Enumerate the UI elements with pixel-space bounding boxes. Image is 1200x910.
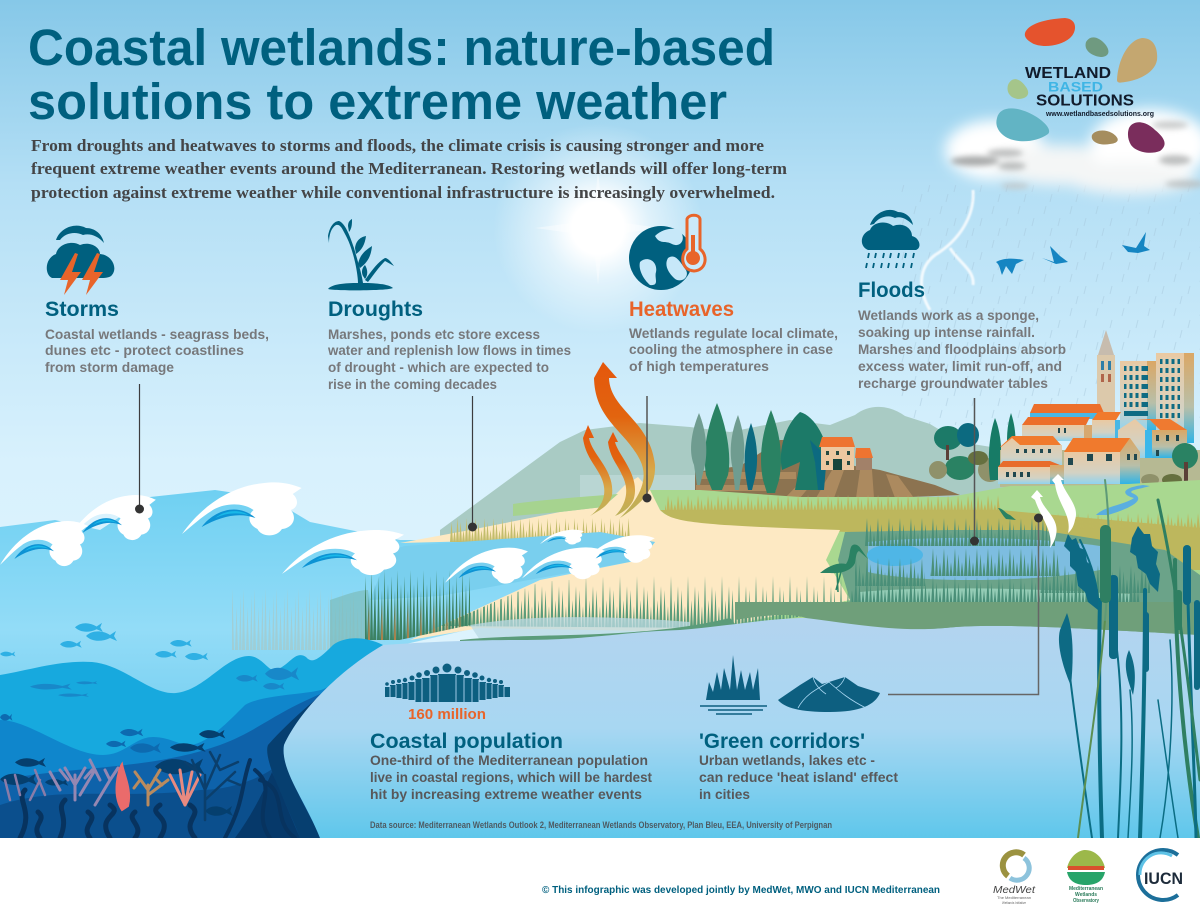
body text — [699, 752, 898, 802]
wave 2 — [68, 495, 156, 540]
panel: storms — [45, 226, 269, 375]
logo: Mediterranean Wetlands Observatory: Mediterranean — [1069, 886, 1104, 892]
white water arrows — [1031, 474, 1076, 548]
trees — [691, 403, 843, 493]
body text — [858, 308, 1066, 391]
body text: of drought - which are expected to — [328, 360, 549, 375]
beach and dune — [400, 477, 850, 640]
wave 1 — [0, 521, 88, 566]
pond — [850, 518, 1150, 618]
small bird — [998, 508, 1016, 520]
pointer line: floods — [970, 398, 979, 546]
pointer line: heatwaves — [642, 396, 652, 502]
green land — [640, 480, 1200, 640]
logo: Mediterranean Wetlands Observatory: Wetlands — [1075, 892, 1097, 898]
body text: One-third of the Mediterranean population — [370, 752, 648, 768]
intro text: protection against extreme weather while conventional infrastructure is increasingly overwhelmed. — [31, 183, 775, 202]
body text — [370, 752, 652, 802]
river — [1096, 485, 1150, 515]
sea body — [0, 490, 660, 840]
icon: globe and thermometer — [629, 215, 705, 290]
heading: Floods — [858, 279, 925, 302]
icon: drooping plant — [328, 219, 394, 290]
body text — [629, 326, 838, 374]
heading: Storms — [45, 298, 119, 321]
logo: wetland based solutions: BASED — [1048, 78, 1103, 94]
houses — [998, 404, 1187, 484]
body text: excess water, limit run-off, and — [858, 359, 1062, 374]
panel: floods — [858, 210, 1066, 391]
panel: green corridors — [699, 655, 898, 802]
title: solutions to extreme weather — [28, 73, 727, 130]
body text — [327, 327, 571, 392]
sun glow — [493, 123, 703, 333]
data source: Data source: Mediterranean Wetlands Outlook 2, Mediterranean Wetlands Observatory, Plan Bleu, EEA, University of Perpignan — [370, 820, 832, 830]
submerged reeds — [232, 570, 470, 655]
far right tree — [1141, 443, 1198, 486]
title — [28, 19, 775, 130]
body text: Coastal wetlands - seagrass beds, — [45, 327, 269, 342]
body text: Marshes and floodplains absorb — [858, 342, 1066, 357]
title: Coastal wetlands: nature-based — [28, 19, 775, 76]
village ground — [1000, 450, 1200, 487]
body text: water and replenish low flows in times — [327, 343, 571, 358]
intro text — [31, 136, 787, 202]
icon: dunes — [778, 677, 880, 712]
icon: marsh — [700, 655, 767, 714]
heading: Droughts — [328, 298, 423, 321]
body text: cooling the atmosphere in case — [629, 342, 833, 357]
figure: 160 million: 160 million — [408, 706, 486, 723]
wave 4 — [282, 530, 404, 575]
wave 7 — [584, 535, 655, 563]
stork — [820, 545, 868, 592]
heading: Coastal population — [370, 730, 563, 753]
logo: MedWet: MedWet — [993, 885, 1036, 896]
intro text: From droughts and heatwaves to storms and floods, the climate crisis is causing stronger and more — [31, 136, 764, 155]
church tower — [1097, 330, 1115, 420]
orange heat arrows — [583, 362, 655, 518]
body text: live in coastal regions, which will be hardest — [370, 769, 652, 785]
panel: coastal population — [370, 664, 652, 802]
fish — [0, 623, 299, 816]
rain — [900, 185, 1200, 425]
body text: dunes etc - protect coastlines — [45, 343, 244, 358]
logo: IUCN — [1138, 850, 1183, 900]
body text: Wetlands regulate local climate, — [629, 326, 838, 341]
logo: MedWet — [993, 852, 1036, 905]
logo: MedWet: The Mediterranean — [997, 895, 1031, 900]
lagoon — [370, 532, 655, 600]
body text: recharge groundwater tables — [858, 376, 1048, 391]
village buildings — [998, 330, 1194, 484]
body text: Urban wetlands, lakes etc - — [699, 752, 875, 768]
logo: wetland based solutions: WETLAND — [1025, 65, 1111, 82]
logo: wetland based solutions — [996, 18, 1165, 153]
birds — [996, 232, 1150, 275]
underwater layers — [0, 638, 383, 840]
grass beach foreground — [440, 568, 862, 646]
body text: from storm damage — [45, 360, 175, 375]
olive reed strip — [660, 495, 1200, 570]
body text — [45, 327, 269, 375]
logo: Mediterranean Wetlands Observatory: Observatory — [1073, 898, 1100, 904]
wave 5 — [445, 548, 528, 584]
foreground reeds — [1059, 480, 1200, 838]
far hills and mountain — [440, 407, 1200, 540]
wave 6 — [522, 547, 605, 579]
foreground panel — [284, 618, 1200, 838]
village trees — [929, 413, 1015, 482]
pointer line: green corridors — [888, 514, 1043, 694]
green bank — [735, 602, 1200, 635]
body text: Wetlands work as a sponge, — [858, 308, 1039, 323]
village background farm — [695, 440, 960, 499]
icon: crowd of people — [385, 664, 510, 702]
pointer line: storms — [135, 384, 144, 514]
logo: Mediterranean Wetlands Observatory — [1067, 850, 1105, 904]
wetland meadow — [830, 530, 1200, 640]
waves — [0, 482, 655, 584]
heading: Heatwaves — [629, 298, 734, 321]
body text: can reduce 'heat island' effect — [699, 769, 898, 785]
coral reef — [5, 752, 295, 838]
logo: wetland based solutions: SOLUTIONS — [1036, 92, 1134, 110]
wave 3 — [182, 482, 302, 535]
pointer line: droughts — [468, 396, 477, 532]
farm house — [819, 437, 873, 470]
body text: rise in the coming decades — [328, 377, 497, 392]
heading: 'Green corridors' — [699, 730, 865, 753]
body text: soaking up intense rainfall. — [858, 325, 1035, 340]
panel: heatwaves — [629, 215, 838, 374]
body text: in cities — [699, 786, 750, 802]
intro text: frequent extreme weather events around the Mediterranean. Restoring wetlands will offer long-term — [31, 159, 787, 178]
body text: Marshes, ponds etc store excess — [328, 327, 540, 342]
body text: hit by increasing extreme weather events — [370, 786, 642, 802]
high-rise blocks — [1120, 353, 1194, 443]
body text: of high temperatures — [629, 359, 769, 374]
logo: IUCN: IUCN — [1144, 869, 1183, 888]
footer band — [0, 838, 1200, 910]
storm cloud — [945, 109, 1200, 194]
lightning — [922, 190, 973, 310]
footer credit: © This infographic was developed jointly by MedWet, MWO and IUCN Mediterranean — [542, 884, 940, 896]
icon: rain cloud — [862, 210, 919, 268]
logo: MedWet: Wetlands Initiative — [1002, 900, 1027, 905]
wave 8 — [540, 530, 584, 545]
panel: droughts — [327, 219, 571, 392]
logo: wetland based solutions: www.wetlandbasedsolutions.org — [1045, 109, 1154, 118]
icon: storm cloud — [47, 226, 114, 295]
dune grass — [450, 494, 630, 542]
